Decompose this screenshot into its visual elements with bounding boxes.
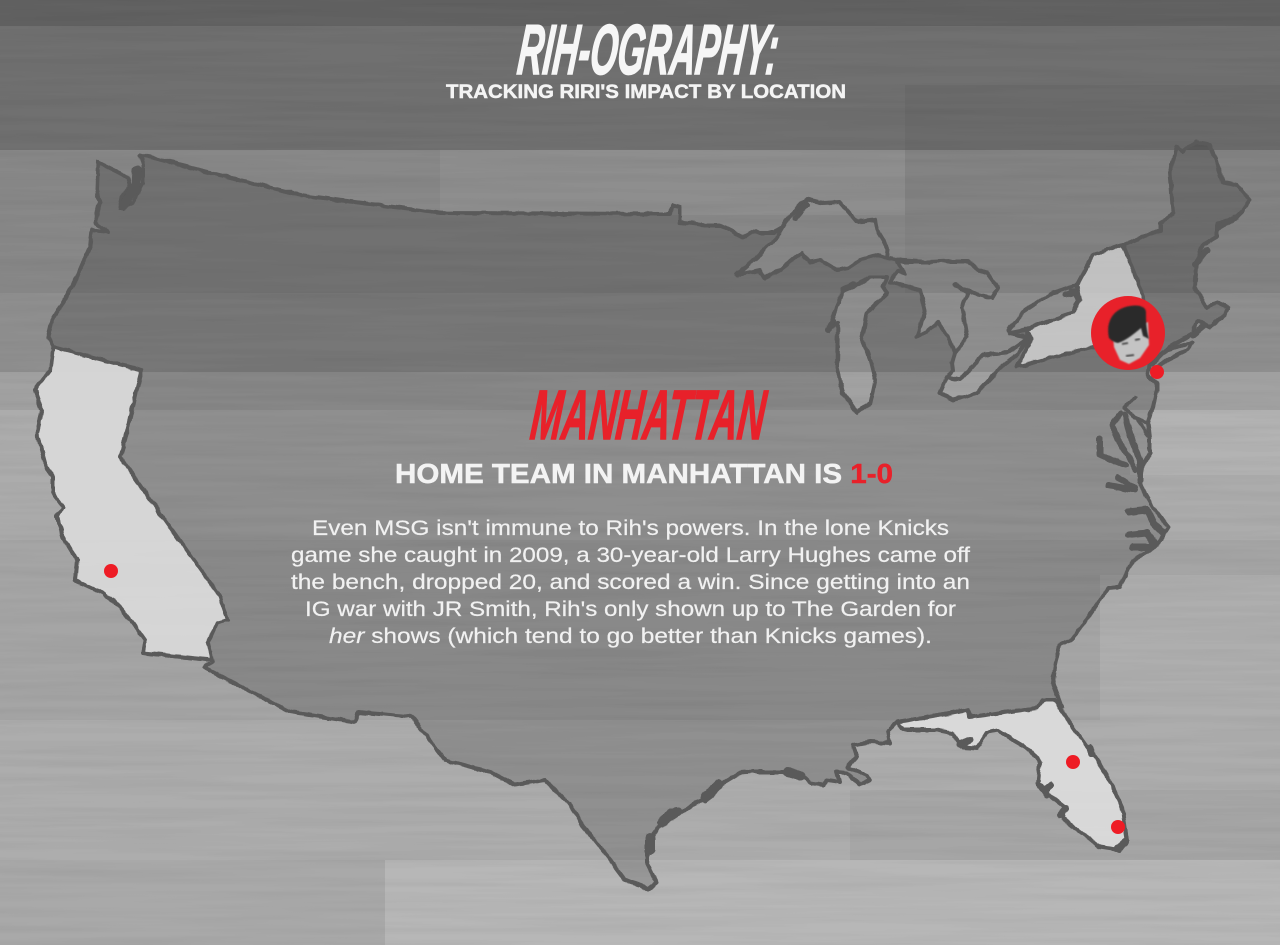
dot: central Florida [1066,755,1080,769]
body text: Even MSG isn't immune to Rih's powers. In the lone Knicks [312,517,949,540]
body text: her shows (which tend to go better than Knicks games). [329,625,932,648]
title: RIH-OGRAPHY: [514,11,783,90]
dot: Manhattan [1150,365,1164,379]
body text [291,517,970,648]
state: California [35,347,228,660]
icon: Rihanna portrait marker [1091,296,1165,370]
face [1113,322,1149,364]
dot: California [104,564,118,578]
location heading: MANHATTAN [527,375,770,454]
body text: the bench, dropped 20, and scored a win. Since getting into an [291,571,970,594]
state: Florida [897,700,1127,850]
country outline with Great Lakes [35,142,1250,890]
eyes and mouth [1122,339,1140,356]
subtitle: TRACKING RIRI'S IMPACT BY LOCATION [446,82,846,103]
map of the United States [35,142,1250,890]
state: New York [1017,245,1150,367]
hair [1108,305,1149,343]
record headline: HOME TEAM IN MANHATTAN IS 1-0 [395,458,893,489]
dot: south Florida [1111,820,1125,834]
body text: game she caught in 2009, a 30-year-old Larry Hughes came off [291,544,970,567]
body text: IG war with JR Smith, Rih's only shown up to The Garden for [305,598,956,621]
coastal inlets and sounds [123,170,1235,850]
